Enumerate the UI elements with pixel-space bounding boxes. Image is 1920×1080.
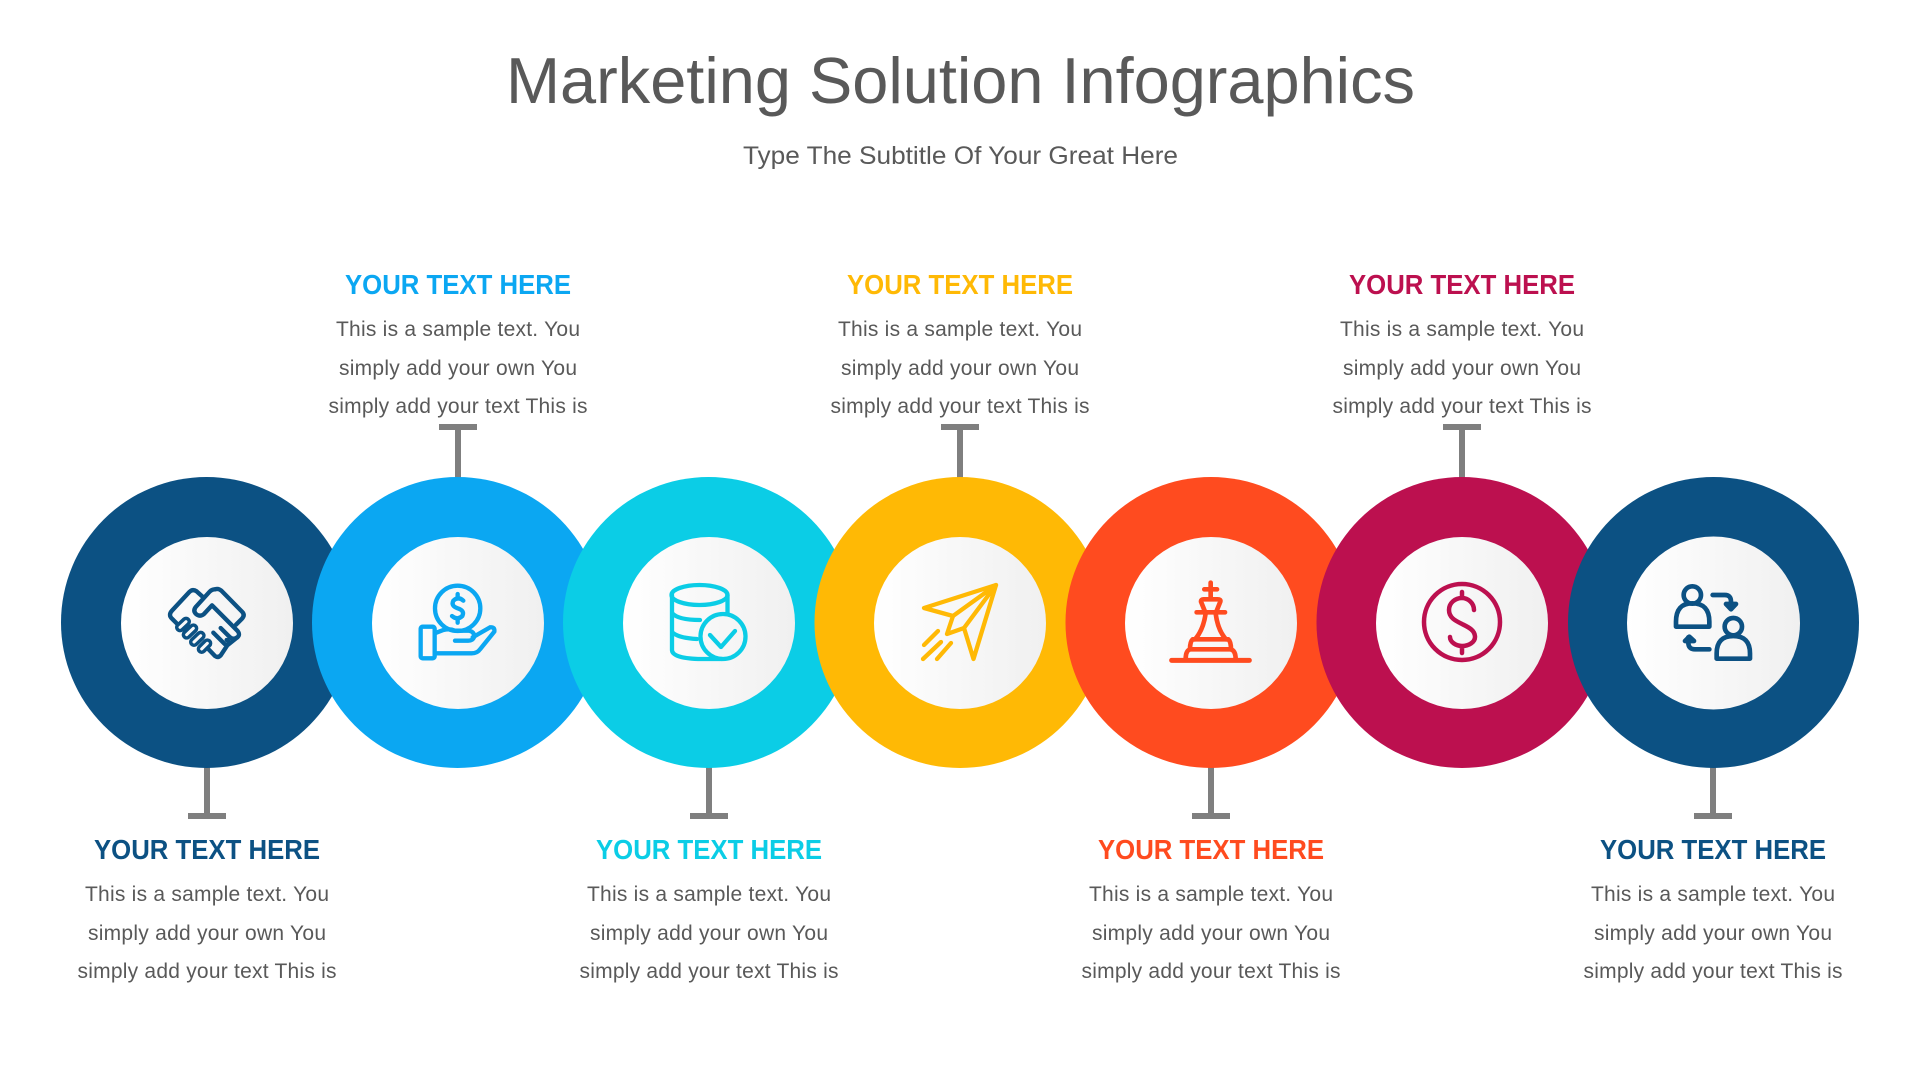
body text 4: simply add your text This is: [830, 395, 1090, 418]
ring 1: [61, 477, 352, 768]
step 2: money in hand (blue): [312, 269, 603, 768]
icon: dollar coin: [1424, 584, 1500, 660]
body text 3: simply add your text This is: [580, 960, 838, 983]
body text 1: simply add your own You: [88, 922, 326, 945]
inner disc 2: [372, 537, 544, 709]
body text 6: This is a sample text. You: [1340, 318, 1584, 341]
ring 2: [312, 477, 603, 768]
heading 3: YOUR TEXT HERE: [596, 834, 822, 865]
ring 5: [1066, 477, 1356, 768]
icon: handshake: [170, 589, 244, 657]
body text 5: This is a sample text. You: [1089, 883, 1333, 906]
connector stem 4: [941, 424, 979, 478]
body text 7: simply add your own You: [1594, 922, 1832, 945]
icon: coin over hand: [421, 586, 494, 658]
icon: database with check: [672, 585, 746, 659]
ring 3: [563, 477, 854, 768]
step 7: people exchange (dark blue): [1568, 477, 1859, 983]
inner disc 6: [1376, 537, 1548, 709]
heading 5: YOUR TEXT HERE: [1098, 834, 1324, 865]
step 6: dollar coin (crimson): [1316, 269, 1608, 768]
ring 7: [1568, 477, 1859, 768]
ring 4: [814, 477, 1106, 768]
connector stem 7: [1694, 767, 1732, 819]
heading 6: YOUR TEXT HERE: [1349, 269, 1575, 300]
subtitle: Type The Subtitle Of Your Great Here: [743, 142, 1178, 170]
connector stem 3: [690, 767, 728, 819]
body text 1: This is a sample text. You: [85, 883, 329, 906]
body text 6: simply add your own You: [1343, 357, 1581, 380]
connector stem 2: [439, 424, 477, 478]
inner disc 4: [874, 537, 1046, 709]
body text 1: [78, 883, 336, 983]
inner disc 7: [1627, 536, 1800, 710]
step 1: partnership (dark blue): [61, 477, 352, 983]
icon: people exchange: [1676, 586, 1750, 659]
connector stem 5: [1192, 767, 1230, 819]
step 3: database check (cyan): [563, 477, 854, 983]
body text 7: simply add your text This is: [1584, 960, 1842, 983]
connector stem 6: [1443, 424, 1481, 478]
body text 6: simply add your text This is: [1332, 395, 1592, 418]
step 4: paper plane (yellow): [814, 269, 1106, 768]
body text 4: simply add your own You: [841, 357, 1079, 380]
heading 2: YOUR TEXT HERE: [345, 269, 571, 300]
inner disc 3: [623, 537, 795, 709]
body text 5: simply add your own You: [1092, 922, 1330, 945]
body text 6: [1332, 318, 1592, 418]
body text 2: This is a sample text. You: [336, 318, 580, 341]
icon: chess king: [1172, 583, 1249, 660]
body text 4: [830, 318, 1090, 418]
connector stem 1: [188, 767, 226, 819]
heading 7: YOUR TEXT HERE: [1600, 834, 1826, 865]
inner disc 1: [121, 537, 293, 709]
inner disc 5: [1125, 537, 1297, 709]
body text 2: simply add your own You: [339, 357, 577, 380]
body text 4: This is a sample text. You: [838, 318, 1082, 341]
body text 5: [1082, 883, 1340, 983]
body text 3: [580, 883, 838, 983]
body text 7: This is a sample text. You: [1591, 883, 1835, 906]
title: Marketing Solution Infographics: [506, 44, 1415, 117]
body text 3: simply add your own You: [590, 922, 828, 945]
body text 1: simply add your text This is: [78, 960, 336, 983]
icon: paper plane: [923, 585, 996, 659]
ring 6: [1316, 477, 1608, 768]
body text 7: [1584, 883, 1842, 983]
heading 4: YOUR TEXT HERE: [847, 269, 1073, 300]
body text 2: [328, 318, 588, 418]
body text 5: simply add your text This is: [1082, 960, 1340, 983]
step 5: chess king (orange): [1066, 477, 1356, 983]
body text 2: simply add your text This is: [328, 395, 588, 418]
body text 3: This is a sample text. You: [587, 883, 831, 906]
heading 1: YOUR TEXT HERE: [94, 834, 320, 865]
